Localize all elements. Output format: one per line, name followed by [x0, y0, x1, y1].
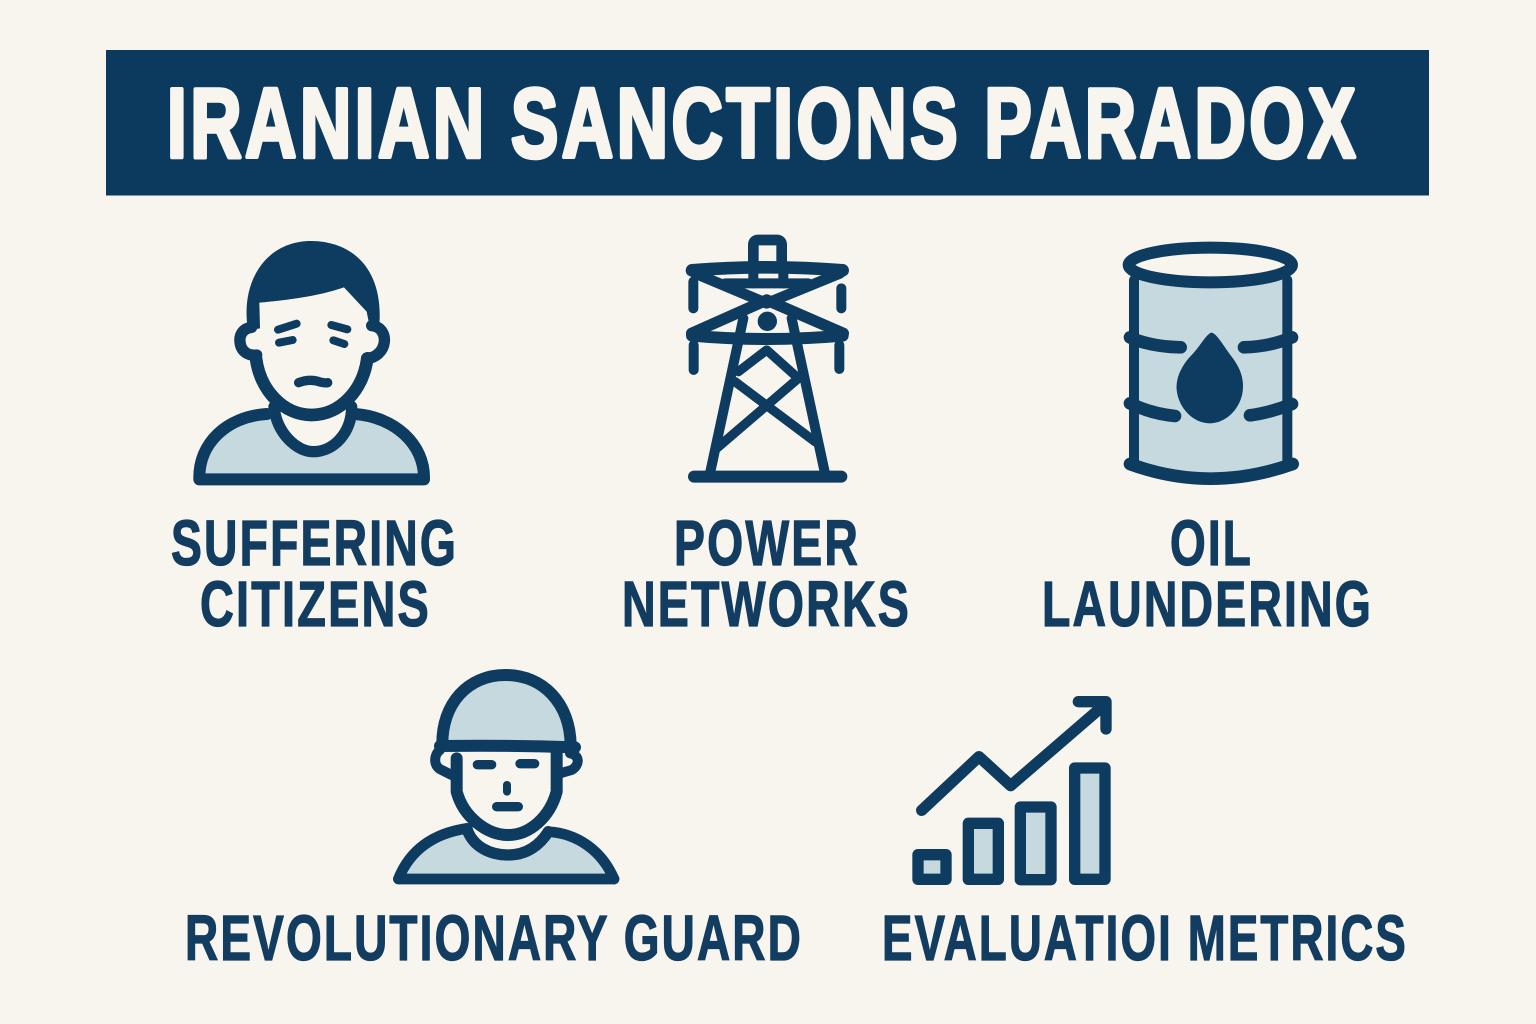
- icon: oil barrel with drop: [1129, 248, 1293, 479]
- label: revolutionary guard: REVOLUTIONARY GUARD: [185, 902, 803, 974]
- title banner: [106, 50, 1429, 196]
- icon: evaluation chart with rising arrow: [918, 702, 1106, 880]
- label: oil laundering: [1042, 507, 1373, 640]
- icon: suffering citizen: [199, 241, 424, 479]
- icon: revolutionary guard soldier: [398, 675, 614, 879]
- label: suffering citizens: [171, 507, 458, 640]
- label: suffering citizens: SUFFERING: [171, 507, 458, 579]
- label: oil laundering: LAUNDERING: [1042, 568, 1373, 640]
- label: power networks: NETWORKS: [622, 568, 911, 640]
- label: oil laundering: OIL: [1170, 507, 1253, 579]
- icon: oil drop: [1177, 333, 1243, 423]
- label: power networks: POWER: [674, 507, 860, 579]
- label: suffering citizens: CITIZENS: [200, 568, 431, 640]
- label: power networks: [622, 507, 911, 640]
- icon: power transmission tower: [692, 240, 843, 477]
